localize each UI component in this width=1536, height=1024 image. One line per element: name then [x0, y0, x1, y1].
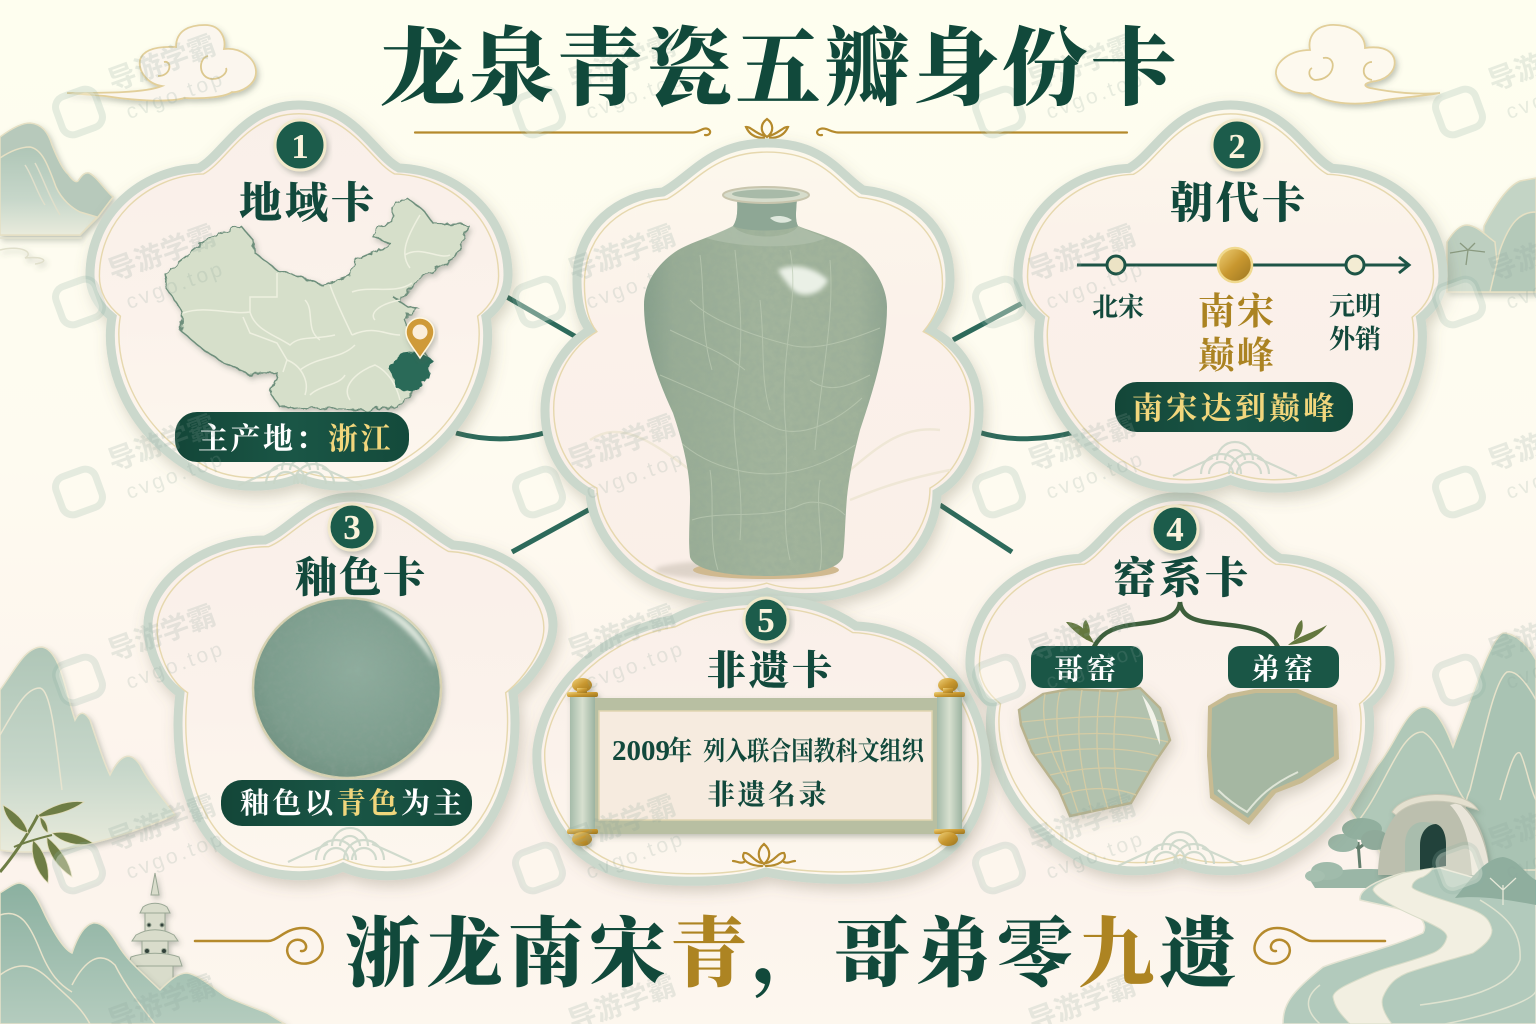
- pill: 弟窑: 弟窑: [1251, 653, 1317, 686]
- watermarks: 导游学霸: [562, 784, 681, 860]
- watermarks: cvgo.top: [583, 67, 688, 124]
- badge 2: 2: [1228, 127, 1246, 166]
- watermarks: 导游学霸: [102, 784, 221, 860]
- label pill: [175, 412, 409, 462]
- panel: card 2 dynasty: [1018, 105, 1443, 488]
- decoration: tree: [1305, 818, 1405, 888]
- glaze disc: [250, 595, 445, 785]
- title divider ornament: [415, 119, 1127, 138]
- label pill: [1115, 382, 1353, 432]
- branching vine: [1066, 602, 1327, 647]
- watermarks: 导游学霸: [562, 404, 681, 480]
- connector lines: [456, 293, 1075, 552]
- decoration: mountains lower left back: [0, 647, 175, 852]
- label pill: 釉色以青色为主: [240, 787, 465, 820]
- panel: card 5 heritage: [537, 598, 986, 881]
- bottom slogan: 浙龙南宋青，: [345, 913, 834, 999]
- watermarks: 导游学霸: [102, 214, 221, 290]
- pill: 哥窑: 哥窑: [1054, 653, 1120, 686]
- scroll: [567, 678, 965, 846]
- timeline label: 元明外销: 外销: [1329, 325, 1381, 354]
- ceramic shard: ge kiln: [1019, 688, 1170, 816]
- badge 5: [744, 598, 788, 642]
- icon: cloud left: [67, 25, 256, 101]
- watermarks: cvgo.top: [583, 447, 688, 504]
- watermarks: cvgo.top: [583, 827, 688, 884]
- badge 4: [1152, 506, 1198, 552]
- watermarks: 导游学霸: [1022, 404, 1141, 480]
- decoration: river: [1283, 868, 1536, 1024]
- heading: 釉色卡: 釉色卡: [295, 555, 427, 602]
- timeline label: 元明外销: [1329, 292, 1381, 354]
- bottom slogan: 哥弟零九遗: [834, 913, 1242, 997]
- heading: 非遗卡: 非遗卡: [706, 648, 835, 693]
- watermarks: cvgo.top: [1043, 67, 1148, 124]
- vase: [640, 187, 890, 580]
- timeline label: 南宋巅峰: 巅峰: [1198, 335, 1276, 377]
- watermarks: 导游学霸: [562, 214, 681, 290]
- panel: card 4 kiln: [970, 497, 1390, 871]
- heading: 朝代卡: 朝代卡: [1170, 180, 1308, 228]
- decoration: mountains lower left front: [0, 883, 285, 1024]
- panel: central flower backing: [545, 143, 979, 598]
- watermarks: 导游学霸: [102, 24, 221, 100]
- timeline label: 南宋巅峰: [1198, 291, 1276, 377]
- watermarks: cvgo.top: [123, 257, 228, 314]
- decoration: mountains upper left: [0, 123, 113, 264]
- lotus ornament: [733, 844, 795, 866]
- watermarks: 导游学霸: [1022, 24, 1141, 100]
- decoration: pagoda: [128, 873, 182, 994]
- label pill: 南宋达到巅峰: [1132, 391, 1338, 426]
- heading: 窑系卡: 窑系卡: [1113, 554, 1251, 603]
- watermarks: cvgo.top: [123, 827, 228, 884]
- watermarks: cvgo.top: [1043, 637, 1148, 694]
- watermarks: cvgo.top: [1043, 257, 1148, 314]
- Zhejiang highlight: [390, 352, 433, 392]
- timeline label: 元明外销: 元明: [1329, 292, 1381, 321]
- scroll text: 2009: [612, 735, 670, 767]
- watermarks: 导游学霸: [1022, 214, 1141, 290]
- icon: cloud right: [1276, 25, 1440, 104]
- ornament: swirl right: [1254, 928, 1385, 964]
- icon: bamboo: [0, 802, 93, 883]
- watermarks: 导游学霸: [102, 594, 221, 670]
- watermarks: 导游学霸: [562, 24, 681, 100]
- watermarks: cvgo.top: [123, 67, 228, 124]
- timeline label: 北宋: 北宋: [1092, 293, 1144, 322]
- badge 5: 5: [757, 601, 775, 640]
- badge 3: 3: [343, 508, 361, 547]
- watermarks: cvgo.top: [583, 257, 688, 314]
- panel: card 1 region: [90, 105, 508, 486]
- panel: card 3 glaze: [148, 497, 553, 876]
- timeline: [1077, 248, 1409, 282]
- pill: 哥窑: [1031, 646, 1143, 688]
- badge 1: 1: [291, 127, 309, 166]
- watermarks: 导游学霸: [562, 594, 681, 670]
- decoration: mountains lower right: [1350, 633, 1536, 890]
- bottom slogan: [345, 913, 1242, 999]
- scroll text: 年: [668, 735, 692, 766]
- timeline label: 南宋巅峰: 南宋: [1198, 291, 1276, 333]
- icon: location pin: [406, 318, 434, 358]
- badge 1: [275, 120, 325, 170]
- watermarks: cvgo.top: [123, 637, 228, 694]
- watermarks: 导游学霸: [1022, 784, 1141, 860]
- watermarks: cvgo.top: [1043, 827, 1148, 884]
- scroll text: 列入联合国教科文组织: [703, 737, 926, 766]
- ornament: swirl left: [195, 928, 323, 964]
- decoration: kiln arch: [1378, 794, 1490, 877]
- decoration: mountains upper right: [1447, 178, 1536, 292]
- watermarks: cvgo.top: [123, 447, 228, 504]
- pill: 弟窑: [1228, 646, 1339, 688]
- label pill: [221, 780, 472, 826]
- watermarks: cvgo.top: [1043, 447, 1148, 504]
- watermarks: cvgo.top: [583, 637, 688, 694]
- heading: 地域卡: 地域卡: [239, 180, 377, 228]
- badge 2: [1212, 120, 1262, 170]
- watermarks: 导游学霸: [1022, 594, 1141, 670]
- badge 3: [329, 504, 375, 550]
- map of China: [165, 198, 468, 410]
- ceramic shard: di kiln: [1207, 689, 1339, 825]
- scroll text: 非遗名录: [707, 779, 829, 811]
- title: 龙泉青瓷五瓣身份卡: [380, 23, 1176, 117]
- watermarks: 导游学霸: [102, 404, 221, 480]
- label pill: 主产地：浙江: [198, 423, 393, 456]
- decoration: foreground bushes: [1455, 857, 1536, 905]
- badge 4: 4: [1166, 510, 1184, 549]
- scroll text: [612, 735, 926, 811]
